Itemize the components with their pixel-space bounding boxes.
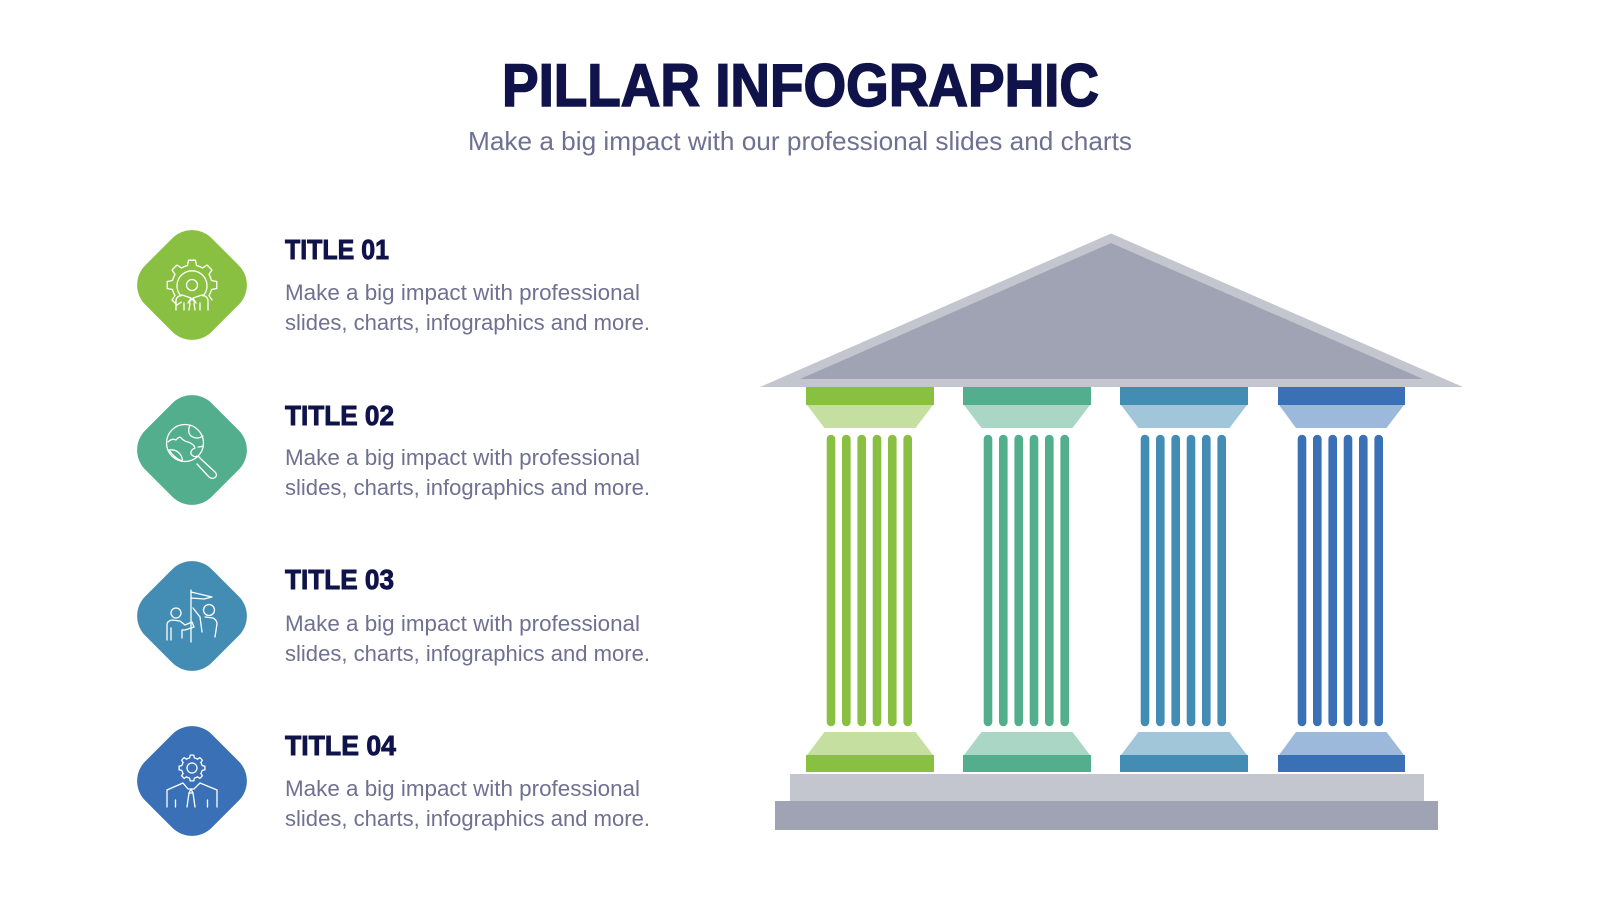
body text — [285, 776, 650, 831]
body text: slides, charts, infographics and more. — [285, 475, 650, 500]
icon: globe under magnifier on teal diamond — [126, 384, 258, 516]
column 3: blue — [1120, 387, 1248, 772]
column 4: dark blue — [1278, 387, 1405, 772]
heading: TITLE 01 — [285, 234, 389, 265]
roof — [760, 234, 1463, 387]
icon: gear with person on green diamond — [126, 219, 258, 351]
body text: Make a big impact with professional — [285, 280, 640, 305]
heading: TITLE 03 — [285, 564, 394, 595]
body text — [285, 445, 650, 500]
icon: two people raising flag on blue diamond — [126, 550, 258, 682]
body text: Make a big impact with professional — [285, 445, 640, 470]
base steps — [775, 774, 1438, 830]
icon: businessperson with gear head on dark blue diamond — [126, 715, 258, 847]
column 2: teal — [963, 387, 1091, 772]
item 03 — [126, 550, 650, 682]
body text: Make a big impact with professional — [285, 611, 640, 636]
title: PILLAR INFOGRAPHIC — [502, 52, 1099, 119]
heading: TITLE 02 — [285, 400, 394, 431]
body text — [285, 280, 650, 335]
body text: Make a big impact with professional — [285, 776, 640, 801]
item 04 — [126, 715, 650, 847]
pillar temple illustration — [760, 234, 1463, 830]
body text — [285, 611, 650, 666]
body text: slides, charts, infographics and more. — [285, 806, 650, 831]
body text: slides, charts, infographics and more. — [285, 641, 650, 666]
body text: slides, charts, infographics and more. — [285, 310, 650, 335]
item 01 — [126, 219, 650, 351]
column 1: green — [806, 387, 934, 772]
heading: TITLE 04 — [285, 730, 396, 761]
item 02 — [126, 384, 650, 516]
subtitle: Make a big impact with our professional slides and charts — [468, 126, 1132, 156]
